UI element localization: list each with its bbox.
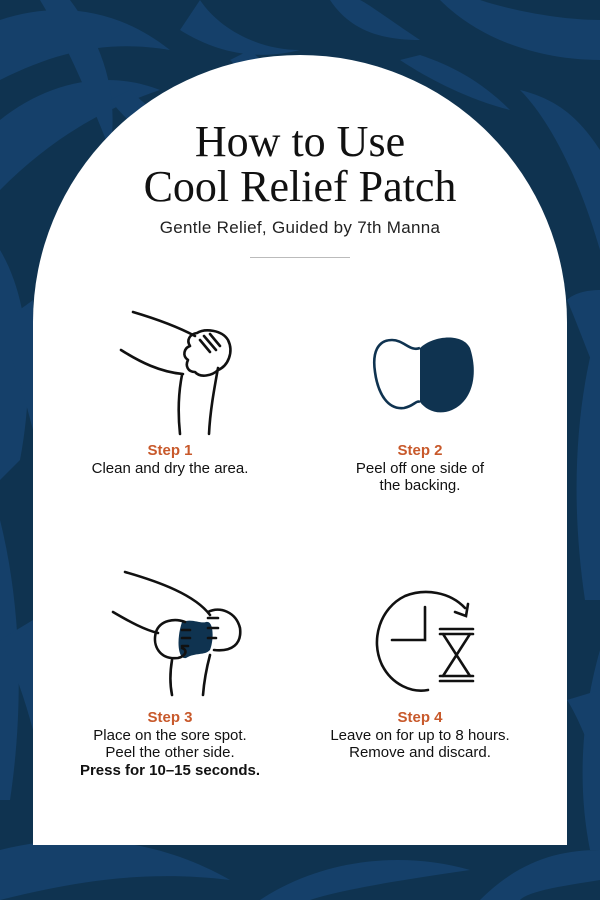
step 4 text — [330, 709, 510, 761]
title: How to Use — [195, 117, 405, 166]
icon: applying patch — [112, 570, 242, 696]
step 1 text: Step 1 — [147, 442, 192, 459]
step 3 text — [80, 709, 260, 778]
step 4 text: Step 4 — [397, 709, 442, 726]
step 2 text: Step 2 — [397, 442, 442, 459]
step 2 text: Peel off one side of — [356, 460, 484, 476]
icon: cleaning knee — [120, 310, 232, 436]
step 3 text: Press for 10–15 seconds. — [80, 762, 260, 778]
step 2 text — [356, 442, 484, 494]
icon: patch peeling — [372, 338, 474, 412]
step 3 text: Step 3 — [147, 709, 192, 726]
title — [144, 117, 456, 211]
step 1 text: Clean and dry the area. — [92, 460, 248, 476]
step 2 text: the backing. — [380, 477, 460, 494]
subtitle: Gentle Relief, Guided by 7th Manna — [160, 218, 440, 237]
step 3 text: Peel the other side. — [105, 744, 235, 761]
step 4 text: Remove and discard. — [349, 744, 491, 761]
step 3 text: Place on the sore spot. — [93, 726, 247, 744]
step 1 text — [92, 442, 248, 476]
icon: clock and hourglass — [376, 590, 474, 692]
panel: white arch — [33, 55, 567, 845]
title: Cool Relief Patch — [144, 162, 456, 211]
step 4 text: Leave on for up to 8 hours. — [330, 726, 510, 744]
